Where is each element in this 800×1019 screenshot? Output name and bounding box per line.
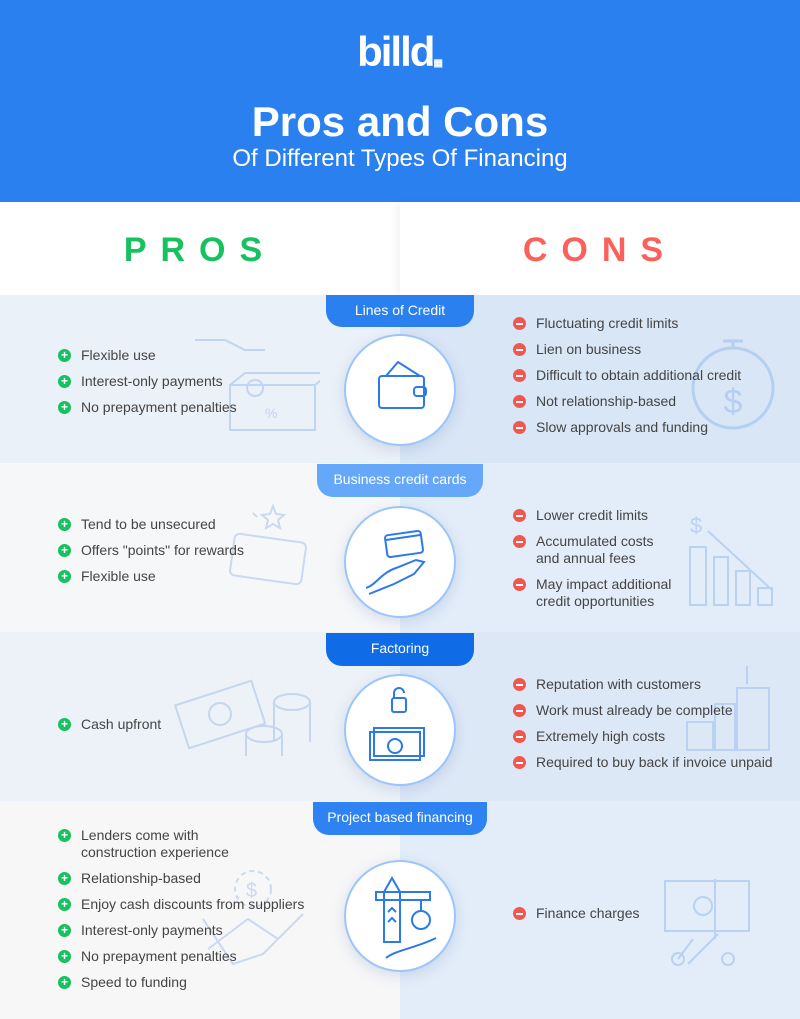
logo: billd▦ [357,28,443,75]
pros heading: PROS [124,231,276,269]
cons list: credit opportunities [536,593,654,609]
cons list: Required to buy back if invoice unpaid [536,754,773,770]
cons list: Lien on business [536,341,641,357]
icon: card in hand [344,506,456,618]
cons list: Extremely high costs [536,728,665,744]
bg icon: declining chart [689,513,774,606]
bg icon: buildings [686,666,770,751]
pros list: Flexible use [81,347,156,363]
tab [317,464,483,497]
cons list: and annual fees [536,550,636,566]
pros list: Speed to funding [81,974,187,990]
bg icon: handshake [202,870,304,966]
pros list: Enjoy cash discounts from suppliers [81,896,304,912]
cons list: Work must already be complete [536,702,733,718]
bg icon: stopwatch [692,340,774,430]
tab [313,802,487,835]
pros list: Tend to be unsecured [81,516,216,532]
pros list: construction experience [81,844,229,860]
cons list: Reputation with customers [536,676,701,692]
bg icon: card [229,504,307,586]
pros list: Cash upfront [81,716,161,732]
tab: Project based financing [327,809,473,825]
cons list [513,676,773,770]
icon: unlocked cash [344,674,456,786]
panel: factoring [0,632,800,801]
title: Pros and Cons [252,98,548,145]
tab: Lines of Credit [355,302,445,318]
pros list: No prepayment penalties [81,399,237,415]
cons list: Accumulated costs [536,533,654,549]
pros heading [0,202,400,295]
cons list: Difficult to obtain additional credit [536,367,741,383]
pros list: Relationship-based [81,870,201,886]
bg icon: ticket scissors [664,879,750,966]
bg icon: hand coin box [195,339,320,431]
panel: lines of credit [0,295,800,463]
bg icon: stopwatch: $ [724,383,743,421]
cons list: Not relationship-based [536,393,676,409]
bg icon: handshake: $ [246,880,257,902]
header [0,0,800,202]
pros list: Offers "points" for rewards [81,542,244,558]
subtitle: Of Different Types Of Financing [232,145,568,172]
bg icon: cash and coins [174,680,311,756]
panel: business credit cards [0,463,800,632]
cons list: Fluctuating credit limits [536,315,678,331]
cons list: Finance charges [536,905,640,921]
pros list: Interest-only payments [81,373,223,389]
icon: wallet [344,334,456,446]
tab [326,295,474,327]
cons list [513,315,742,435]
tab: Factoring [371,640,429,656]
bg icon: hand coin box: % [265,405,277,421]
panel: project based financing [58,801,800,1019]
cons list: May impact additional [536,576,671,592]
cons heading [400,202,800,295]
pros list [58,827,304,990]
pros list [58,347,237,415]
cons list [513,507,671,609]
icon: crane and hand [344,860,456,972]
pros list: Flexible use [81,568,156,584]
tab [326,633,474,666]
bg icon: declining chart: $ [690,513,702,538]
cons list: Slow approvals and funding [536,419,708,435]
tab: Business credit cards [333,471,467,487]
pros list: Lenders come with [81,827,199,843]
pros list: No prepayment penalties [81,948,237,964]
pros list: Interest-only payments [81,922,223,938]
cons heading: CONS [523,231,677,269]
cons list: Lower credit limits [536,507,648,523]
pros list [58,516,244,584]
